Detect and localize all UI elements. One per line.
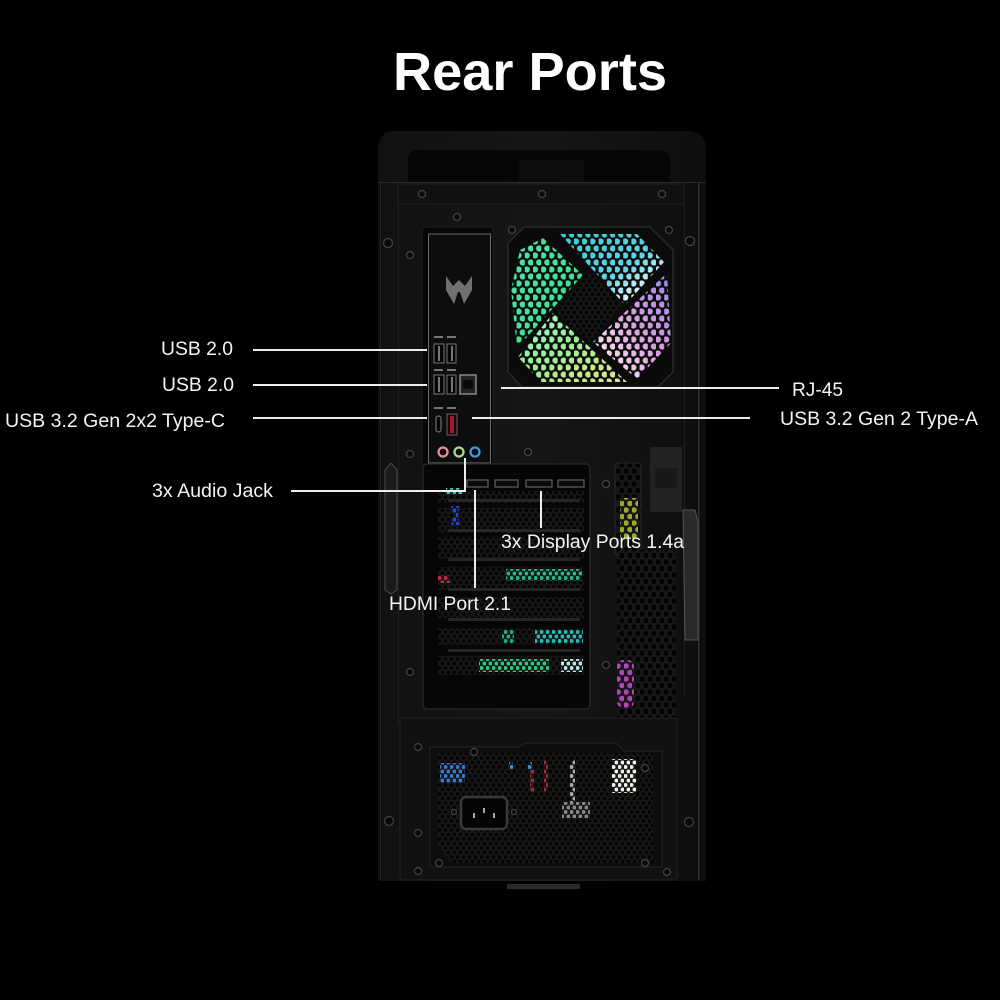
socket pins [473,808,495,818]
GPU ports [467,480,584,487]
fan frame [508,227,673,387]
tower foot [507,884,580,889]
callout: HDMI: HDMI Port 2.1 [389,594,511,615]
callout: USB-C: USB 3.2 Gen 2x2 Type-C [5,411,225,432]
callout: USB-A: USB 3.2 Gen 2 Type-A [780,409,978,430]
power supply [384,718,694,880]
chassis body [378,131,706,881]
screws [384,190,694,676]
RJ-45 port [460,375,476,394]
callout: audio: 3x Audio Jack [152,481,274,502]
expansion slots [423,464,590,709]
callout: HDMI [389,490,511,615]
USB-C port [436,416,441,432]
IO shield [422,227,493,467]
power socket [461,797,507,829]
icon: Predator logo [446,276,472,304]
callout: RJ-45: RJ-45 [792,380,843,401]
side latch and power clip [385,447,698,640]
slot bars [448,499,580,652]
callout: DisplayPort: 3x Display Ports 1.4a [501,532,684,553]
PSU RGB glimpses [440,759,636,818]
fan [508,227,673,387]
USB-A red port [447,414,457,435]
chassis frame [398,184,684,204]
callout: USB 2.0 upper: USB 2.0 [161,339,233,360]
RGB glows [438,488,583,672]
top handle recess [408,150,670,182]
audio jacks [438,448,480,456]
fan hub [555,272,622,342]
title: Rear Ports [393,42,667,102]
PSU vent [438,753,653,863]
GPU bracket rows [438,475,584,491]
PC tower rear [378,131,706,889]
USB ports [434,344,456,394]
callout: audio [152,458,465,502]
callout: USB 2.0 lower: USB 2.0 [162,375,234,396]
callouts [5,339,978,615]
side vent [615,463,676,733]
fan blades [511,234,671,382]
